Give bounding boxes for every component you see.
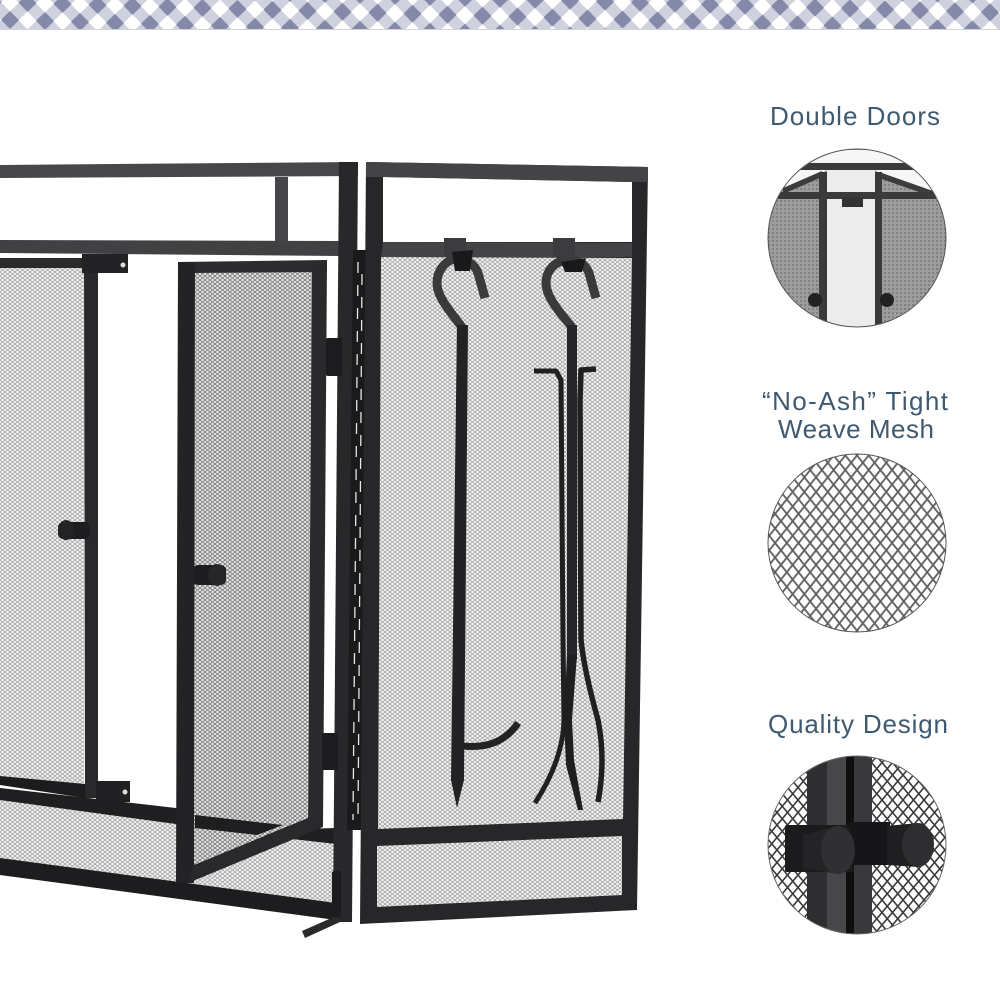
panel: right frame with tools xyxy=(360,162,648,924)
detail circle: double doors xyxy=(768,150,946,326)
frame outline xyxy=(360,162,648,924)
second rail xyxy=(0,240,340,256)
left door mesh xyxy=(0,268,84,784)
foot bracket xyxy=(332,871,341,917)
door upper hinge xyxy=(326,338,342,376)
foot xyxy=(302,916,340,938)
panel: left fixed frame xyxy=(0,162,367,938)
poker hanger clip xyxy=(444,238,473,271)
open door bottom rail xyxy=(188,818,323,883)
open door mesh xyxy=(194,271,312,865)
heading: double doors: Double Doors xyxy=(770,101,940,131)
top rail xyxy=(0,162,358,178)
bottom hinge bracket xyxy=(96,781,130,802)
open door knob xyxy=(193,564,226,586)
bottom rail xyxy=(0,858,336,920)
gingham top band xyxy=(0,0,1000,30)
door lower hinge xyxy=(322,733,338,770)
detail circle: mesh xyxy=(768,454,946,632)
heading: no-ash mesh: “No-Ash” Tight xyxy=(762,386,949,416)
top frame highlight xyxy=(366,162,648,257)
feature: no-ash tight weave mesh xyxy=(762,386,949,632)
heading: no-ash mesh xyxy=(762,386,949,444)
left door top rail xyxy=(0,258,98,268)
detail circle: knobs xyxy=(768,756,946,934)
lower rail xyxy=(0,788,336,844)
open door rail visible behind mesh xyxy=(195,815,283,835)
fireplace screen product illustration xyxy=(0,162,648,938)
upper mesh xyxy=(377,256,633,830)
left door knob xyxy=(58,520,90,540)
feature: double doors xyxy=(768,106,946,328)
left door stile xyxy=(84,258,98,798)
open door top rail xyxy=(178,260,327,273)
hinge strip xyxy=(347,250,367,830)
top hinge bracket xyxy=(82,254,128,273)
circle outline xyxy=(768,149,946,327)
panel: open door xyxy=(176,260,342,883)
open door left stile xyxy=(176,262,195,883)
tongs hanger clip xyxy=(553,238,586,272)
heading: no-ash mesh: Weave Mesh xyxy=(778,414,934,444)
tongs tool xyxy=(534,260,602,810)
open door right stile xyxy=(308,260,327,826)
right stile xyxy=(333,162,358,922)
lower mesh of left panel xyxy=(0,795,335,910)
left door bottom rail xyxy=(0,776,85,798)
poker tool xyxy=(437,259,518,808)
panel: left door xyxy=(0,254,130,802)
lower mesh xyxy=(377,836,622,907)
feature: quality design xyxy=(768,714,946,934)
circle outline xyxy=(768,756,946,934)
short upright xyxy=(275,177,288,241)
heading: quality design: Quality Design xyxy=(768,709,948,739)
